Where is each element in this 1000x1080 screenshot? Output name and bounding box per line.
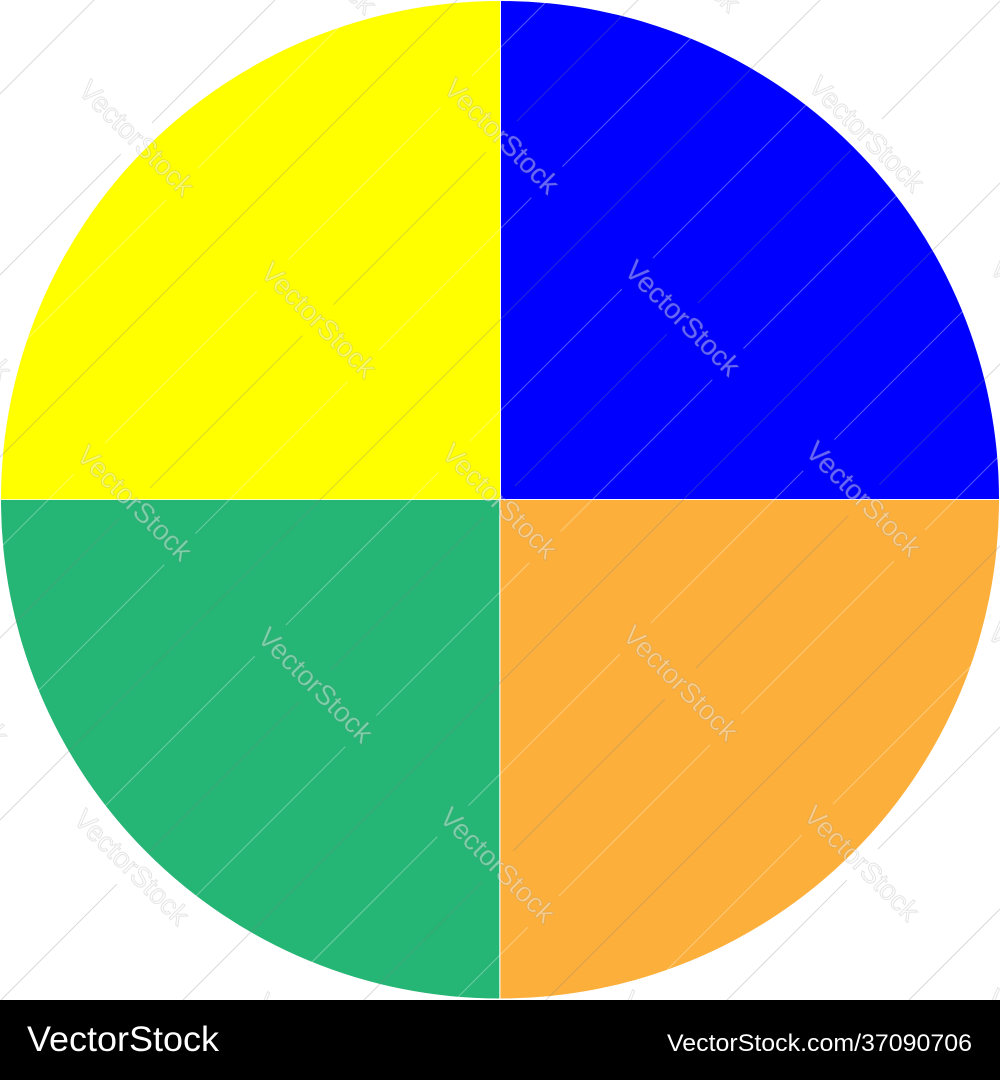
watermark text: VectorStock <box>803 70 931 199</box>
watermark text: VectorStock <box>71 439 199 568</box>
quadrant: orange <box>500 500 999 998</box>
quadrant: blue <box>501 1 999 499</box>
footer bar <box>0 1000 1000 1080</box>
watermark text: VectorStock <box>252 621 380 750</box>
watermark text: VectorStock <box>255 256 383 385</box>
quadrant: green <box>1 500 499 998</box>
watermark text: VectorStock <box>68 803 196 932</box>
watermark text: VectorStock <box>73 74 201 203</box>
watermark text: VectorStock <box>434 801 562 930</box>
watermark text: VectorStock <box>438 72 566 201</box>
footer brand: VectorStock <box>27 1020 220 1059</box>
watermark text: VectorStock <box>617 619 745 748</box>
watermark text: VectorStock <box>436 437 564 566</box>
quadrant: yellow <box>1 1 500 499</box>
footer image id: VectorStock.com/37090706 <box>667 1030 972 1057</box>
watermark text: VectorStock <box>800 435 928 564</box>
watermark text: VectorStock <box>798 799 926 928</box>
watermark text: VectorStock <box>619 254 747 383</box>
